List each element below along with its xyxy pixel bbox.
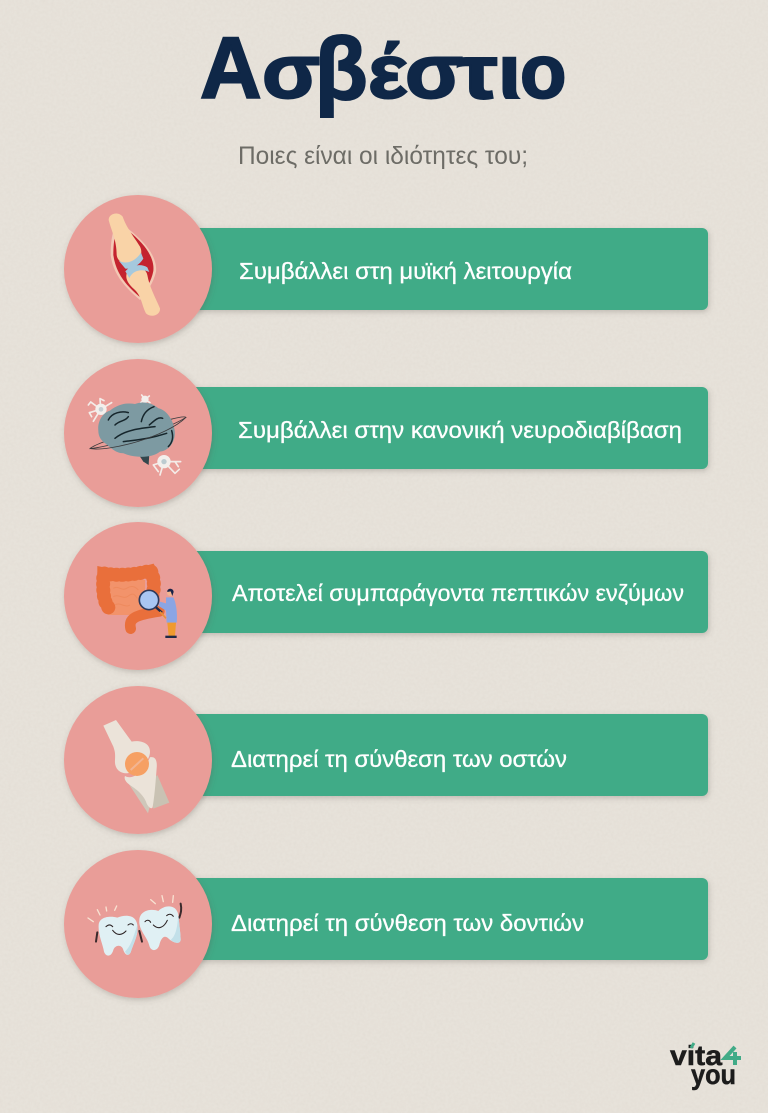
pink circle 2 (64, 359, 212, 507)
logo: vita4you (670, 1040, 741, 1090)
green bar 2 (190, 387, 708, 469)
pink circle 1 (64, 195, 212, 343)
green bar 1 (190, 228, 708, 310)
panel: neurotransmission (64, 359, 708, 507)
icon: intestine with doctor (103, 571, 177, 638)
title: ι (498, 30, 521, 115)
title (200, 18, 566, 118)
title: β (315, 18, 368, 118)
title: έ (368, 30, 406, 115)
title: ο (520, 30, 566, 115)
panel: teeth (64, 850, 708, 998)
pink circle 3 (64, 522, 212, 670)
green bar 3 (190, 551, 708, 633)
label 2: Συμβάλλει στην κανονική νευροδιαβίβαση (238, 417, 682, 443)
subtitle: Ποιες είναι οι ιδιότητες του; (238, 142, 528, 170)
pink circle 4 (64, 686, 212, 834)
green bar 5 (190, 878, 708, 960)
label 1: Συμβάλλει στη μυϊκή λειτουργία (239, 258, 572, 284)
panel: digestive enzymes (64, 522, 708, 670)
icon: brain (88, 395, 186, 475)
panel: muscle function (64, 195, 708, 343)
icon: knee joint (103, 720, 169, 813)
title: σ (405, 30, 463, 115)
panel: bones (64, 686, 708, 834)
icon: joint (109, 213, 160, 316)
title: Α (200, 20, 262, 117)
icon: smiling teeth (88, 896, 181, 956)
title: σ (262, 30, 320, 115)
label 3: Αποτελεί συμπαράγοντα πεπτικών ενζύμων (232, 580, 684, 606)
pink circle 5 (64, 850, 212, 998)
title: τ (457, 30, 498, 115)
logo: vita4you: you (691, 1059, 736, 1090)
label 5: Διατηρεί τη σύνθεση των δοντιών (231, 910, 584, 936)
logo: vita4you: vita (670, 1040, 722, 1071)
label 4: Διατηρεί τη σύνθεση των οστών (231, 746, 567, 772)
green bar 4 (190, 714, 708, 796)
